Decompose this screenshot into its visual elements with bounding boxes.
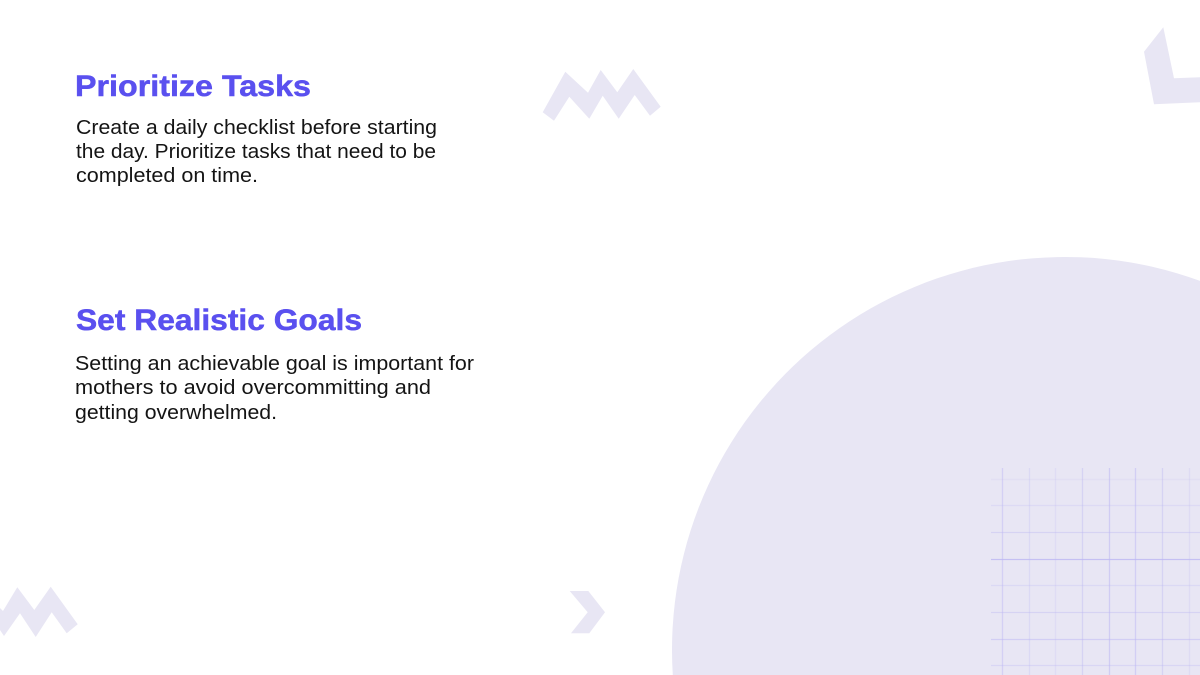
decorative corner chevron top right: [1144, 27, 1200, 104]
text block: Set Realistic Goals description: [75, 353, 474, 424]
grid pattern: [991, 468, 1200, 675]
background circle: [672, 257, 1200, 675]
text block: Set Realistic Goals description: mothers to avoid overcommitting and: [75, 377, 431, 399]
text block: Set Realistic Goals description: getting overwhelmed.: [75, 402, 277, 424]
heading: Prioritize Tasks: Prioritize Tasks: [75, 70, 311, 103]
heading: Set Realistic Goals: Set Realistic Goals: [76, 304, 362, 337]
decorative zigzag top centre: [543, 69, 661, 121]
text block: Prioritize Tasks description: [76, 117, 437, 187]
decorative arrow chevron bottom centre: [570, 591, 605, 633]
text block: Prioritize Tasks description: Create a daily checklist before starting: [76, 117, 437, 139]
text block: Set Realistic Goals description: Setting an achievable goal is important for: [75, 353, 474, 375]
text block: Prioritize Tasks description: completed on time.: [76, 165, 258, 187]
decorative zigzag bottom left: [0, 587, 78, 637]
text block: Prioritize Tasks description: the day. Prioritize tasks that need to be: [76, 141, 436, 163]
